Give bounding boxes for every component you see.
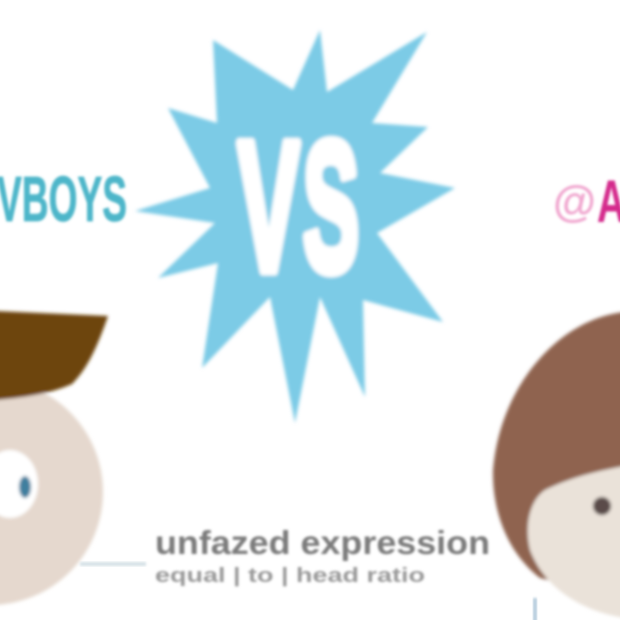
face <box>528 466 620 618</box>
pupil <box>19 476 31 498</box>
annotation text <box>155 524 490 587</box>
left team name: VBOYS <box>0 163 127 235</box>
annotation text: unfazed expression <box>155 524 490 561</box>
VS lettering: V <box>238 103 299 309</box>
eye <box>593 497 611 515</box>
VS lettering: S <box>303 105 359 310</box>
face <box>0 379 103 605</box>
annotation leader line <box>80 562 146 566</box>
lower leader line <box>533 598 537 620</box>
left character <box>0 311 108 605</box>
eye <box>0 450 38 518</box>
right character <box>493 312 620 618</box>
VS lettering <box>238 103 359 310</box>
hat <box>0 311 108 400</box>
annotation text: equal | to | head ratio <box>155 565 425 587</box>
right team name <box>553 168 620 235</box>
starburst with VS <box>135 30 455 423</box>
right team name: @ <box>553 177 596 226</box>
hair <box>493 312 620 600</box>
